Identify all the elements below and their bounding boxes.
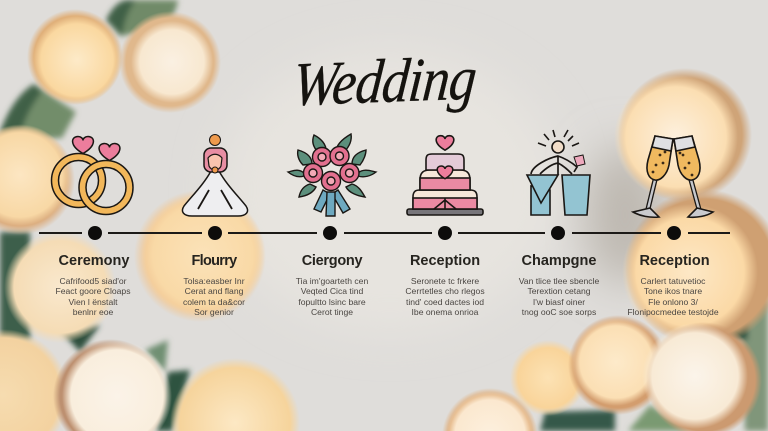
step 3 text: Cerot tinge <box>311 307 353 317</box>
step 1 text <box>56 276 130 317</box>
step 1 text: Cafrifood5 siad'or <box>59 276 127 286</box>
step 2 text <box>183 276 245 317</box>
step 2 text: Sor genior <box>194 307 234 317</box>
icon: wedding rings <box>55 136 130 211</box>
step 1 text: Feact goore Cloaps <box>56 286 130 296</box>
step 6 text: Tone ikos tnare <box>644 286 702 296</box>
step 6 text: Flonipocmedee testojde <box>627 307 719 317</box>
icon: wedding cake <box>407 136 483 215</box>
step 5 text: I'w biasf oiner <box>533 297 585 307</box>
step 6 text <box>627 276 719 317</box>
step 2 heading: Flourry <box>191 252 237 268</box>
icon: champagne glasses <box>633 136 713 217</box>
step 4 text <box>405 276 485 317</box>
step 2 text: Cerat and flang <box>185 286 243 296</box>
step 3 text: Tia im'goarteth cen <box>296 276 368 286</box>
step 4 text: Ibe onema onrioa <box>412 307 478 317</box>
icon: bride <box>182 134 248 216</box>
step 3 text: fopultto lsinc bare <box>298 297 366 307</box>
step 4 text: Seronete tc frkere <box>411 276 479 286</box>
step 4 heading: Reception <box>410 252 480 268</box>
step 2 text: colem ta da&cor <box>183 297 245 307</box>
step 5 text: Terextion cetang <box>527 286 591 296</box>
step 4 text: Cerrtetles cho rlegos <box>405 286 485 296</box>
step 3 text: Veqted Cica tind <box>301 286 363 296</box>
step 5 text: tnog ooC soe sorps <box>522 307 596 317</box>
step 6 heading: Reception <box>639 252 710 268</box>
step 1 heading: Ceremony <box>59 252 129 268</box>
step 4 text: tind' coed dactes iod <box>406 297 484 307</box>
step 1 text: benlnr eoe <box>73 307 113 317</box>
icon: champagne toast figure <box>527 130 590 215</box>
step 5 text <box>518 276 599 317</box>
step 6 text: Fle onlono 3/ <box>648 297 698 307</box>
step 1 text: Vien l ënstalt <box>68 297 118 307</box>
title: Wedding <box>290 44 479 119</box>
step 5 text: Van tlice tlee sbencle <box>519 276 599 286</box>
step 2 text: Tolsa:easber Inr <box>183 276 245 286</box>
icon: bouquet <box>288 134 376 216</box>
step 3 text <box>296 276 368 317</box>
step 3 heading: Ciergony <box>302 252 362 268</box>
step 5 heading: Champgne <box>522 252 596 268</box>
step 6 text: Carlert tatuvetioc <box>641 276 705 286</box>
